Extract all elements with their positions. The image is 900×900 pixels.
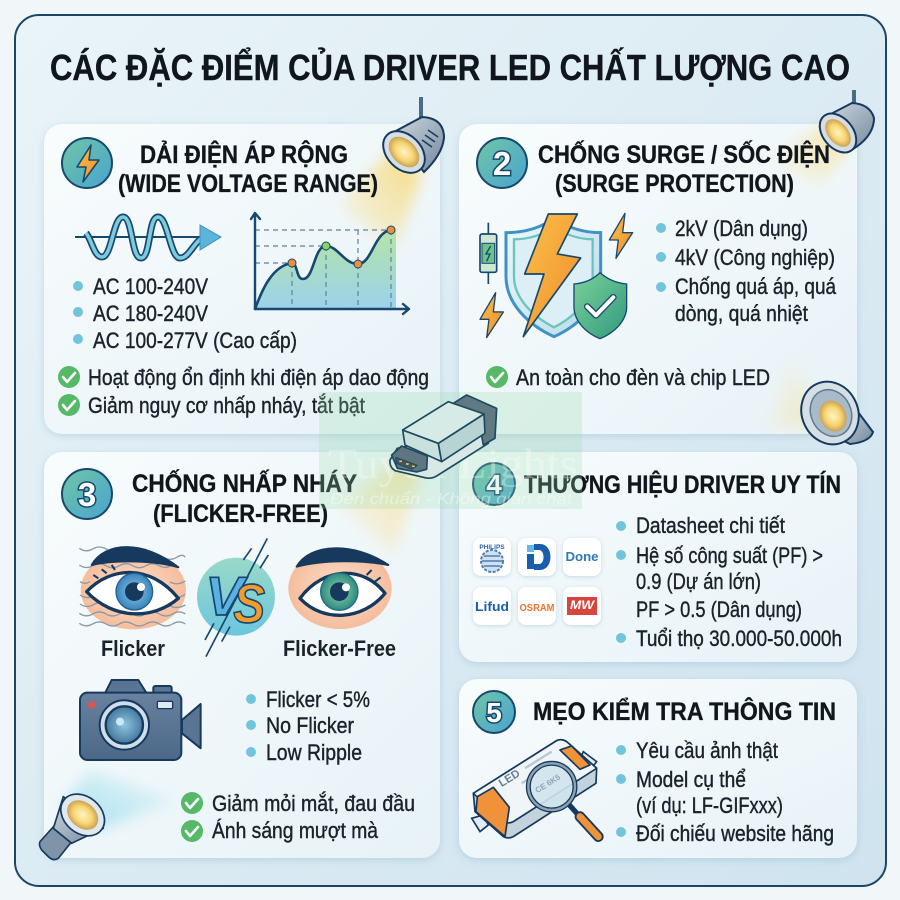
bullets: surge ratings bbox=[656, 216, 837, 326]
watermark: brand overlay: Tuyen Lights bbox=[328, 442, 578, 488]
icon: flashlight bbox=[39, 785, 113, 860]
bullets: brand criteria: Datasheet chi tiết bbox=[636, 513, 785, 538]
panel 2: surge protection bbox=[459, 124, 857, 434]
checklist: voltage benefits: Hoạt động ổn định khi điện áp dao động bbox=[88, 365, 429, 390]
icon: number 3 badge: 3 bbox=[78, 476, 96, 513]
illustration: driver under magnifier: CE 6K5 bbox=[534, 772, 563, 795]
logo: Osram: OSRAM bbox=[520, 603, 554, 614]
eye labels: Flicker-Free bbox=[283, 636, 396, 661]
icon: number 5 badge: 5 bbox=[486, 697, 502, 728]
icon: number 2 badge bbox=[477, 138, 527, 188]
bullets: voltage ranges: AC 100-240V bbox=[93, 274, 208, 299]
light cones: panel 3 bbox=[62, 462, 420, 830]
heading: flicker-free: (FLICKER-FREE) bbox=[153, 500, 328, 528]
heading: surge protection bbox=[538, 139, 830, 198]
bullets: flicker specs: Low Ripple bbox=[266, 740, 362, 765]
bullets: voltage ranges: AC 180-240V bbox=[93, 301, 208, 326]
bullets: flicker specs: No Flicker bbox=[266, 713, 354, 738]
checklist: voltage benefits: Giảm nguy cơ nhấp nháy, tắt bật bbox=[88, 393, 365, 418]
icon: number 4 badge: 4 bbox=[486, 469, 502, 500]
heading: wide voltage range: DẢI ĐIỆN ÁP RỘNG bbox=[140, 139, 348, 169]
bullets: voltage ranges: AC 100-277V (Cao cấp) bbox=[93, 328, 297, 353]
bullets: brand criteria: Hệ số công suất (PF) > bbox=[636, 543, 823, 568]
panel 1: wide voltage range bbox=[44, 124, 440, 434]
logo: D mark bbox=[518, 538, 556, 576]
bullets: brand criteria: 0.9 (Dự án lớn) bbox=[636, 569, 761, 594]
icon: lightning badge bbox=[62, 138, 112, 188]
bullets: verification tips: Đối chiếu website hãng bbox=[636, 821, 834, 846]
bullets: surge ratings: Chống quá áp, quá bbox=[675, 274, 837, 299]
logo: Done: Done bbox=[566, 549, 598, 564]
checklist: voltage benefits bbox=[58, 365, 429, 418]
heading: trusted brands: THƯƠNG HIỆU DRIVER UY TÍN bbox=[524, 469, 841, 499]
bullets: surge ratings: 2kV (Dân dụng) bbox=[675, 216, 808, 241]
icon: spotlight top right bbox=[812, 90, 874, 159]
icon: VS badge: V bbox=[205, 565, 248, 627]
icon: VS badge: S bbox=[233, 572, 265, 634]
bullets: flicker specs: Flicker < 5% bbox=[266, 687, 370, 712]
heading: verification tips: MẸO KIỂM TRA THÔNG TIN bbox=[533, 696, 836, 726]
heading: wide voltage range bbox=[118, 139, 378, 198]
panel 4: trusted brands bbox=[459, 452, 857, 662]
icon: AC wave with arrow bbox=[75, 217, 221, 258]
illustration: driver under magnifier bbox=[472, 740, 598, 838]
icon: VS badge bbox=[197, 538, 275, 657]
panel 3: flicker-free bbox=[39, 452, 440, 860]
logo: Mean Well: MW bbox=[570, 598, 596, 612]
icon: LED driver center bbox=[390, 395, 497, 478]
icon: downlight bottom right bbox=[791, 372, 873, 454]
illustration: flicker eye bbox=[79, 547, 186, 629]
icon: number 4 badge bbox=[473, 463, 515, 505]
line chart: voltage fluctuation bbox=[251, 213, 409, 314]
bullets: verification tips: (ví dụ: LF-GIFxxx) bbox=[636, 793, 783, 818]
bullets: surge ratings: 4kV (Công nghiệp) bbox=[675, 245, 835, 270]
watermark: brand overlay bbox=[319, 392, 582, 509]
bullets: brand criteria bbox=[616, 513, 842, 651]
watermark: brand overlay: Đèn chuẩn - Không gian chất bbox=[330, 490, 573, 508]
bullets: verification tips: Yêu cầu ảnh thật bbox=[636, 738, 778, 763]
heading: flicker-free bbox=[132, 468, 357, 528]
illustration: driver under magnifier: LED bbox=[497, 768, 522, 790]
heading: flicker-free: CHỐNG NHẤP NHÁY bbox=[132, 468, 357, 498]
illustration: flicker-free eye bbox=[288, 548, 392, 629]
logo: Lifud: Lifud bbox=[475, 599, 509, 614]
icon: number 3 badge bbox=[62, 469, 112, 519]
logo: Philips: PHILIPS bbox=[479, 544, 505, 551]
bullets: verification tips bbox=[616, 738, 834, 846]
icon: video camera bbox=[80, 680, 201, 760]
bullets: voltage ranges bbox=[73, 274, 297, 353]
checklist: LED safety: An toàn cho đèn và chip LED bbox=[516, 365, 770, 390]
bullets: verification tips: Model cụ thể bbox=[636, 767, 746, 792]
eye labels bbox=[101, 636, 396, 661]
icon: number 2 badge: 2 bbox=[493, 145, 511, 182]
icon: number 5 badge bbox=[473, 691, 515, 733]
bullets: surge ratings: dòng, quá nhiệt bbox=[675, 301, 808, 326]
brand logos bbox=[473, 538, 601, 625]
checklist: flicker benefits: Ánh sáng mượt mà bbox=[212, 818, 379, 843]
light cones: panel 2 lamps bbox=[770, 125, 848, 430]
eye labels: Flicker bbox=[101, 636, 165, 661]
heading: wide voltage range: (WIDE VOLTAGE RANGE) bbox=[118, 170, 378, 198]
light cone: panel 1 spotlight bbox=[340, 150, 422, 250]
checklist: flicker benefits bbox=[181, 791, 415, 843]
icon: shield with lightning and fuse bbox=[480, 213, 633, 339]
panel 5: verification tips bbox=[459, 679, 857, 858]
icon: spotlight top left bbox=[375, 97, 444, 181]
checklist: flicker benefits: Giảm mỏi mắt, đau đầu bbox=[212, 791, 415, 816]
bullets: brand criteria: PF > 0.5 (Dân dụng) bbox=[636, 597, 802, 622]
heading: surge protection: CHỐNG SURGE / SỐC ĐIỆN bbox=[538, 139, 830, 169]
bullets: brand criteria: Tuổi thọ 30.000-50.000h bbox=[636, 626, 842, 651]
bullets: flicker specs bbox=[246, 687, 370, 765]
heading: surge protection: (SURGE PROTECTION) bbox=[555, 170, 794, 198]
